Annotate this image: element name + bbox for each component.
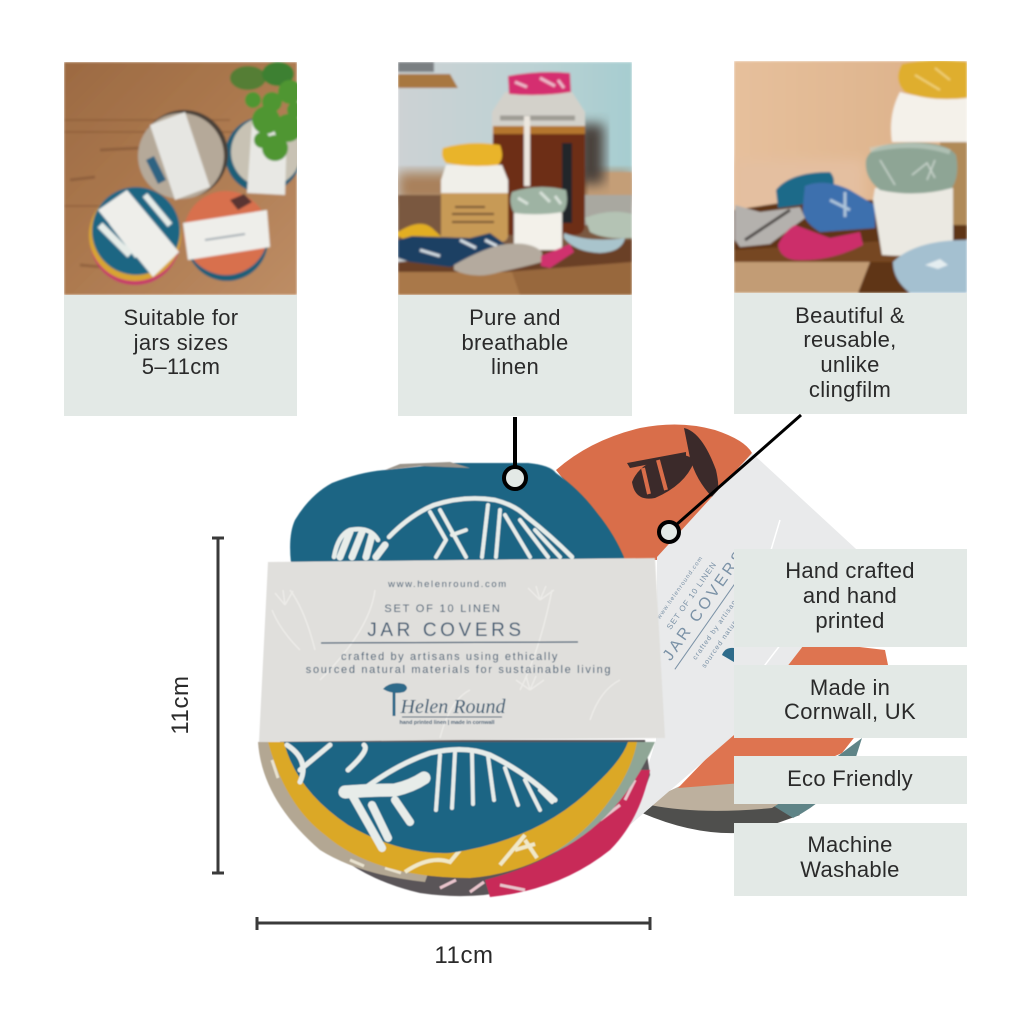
rear band text: www.helenround.com bbox=[656, 555, 705, 621]
panel: machine washable: Washable bbox=[800, 857, 900, 882]
band text bbox=[306, 579, 612, 676]
magenta and grey covers bbox=[280, 740, 650, 896]
table bbox=[398, 240, 632, 274]
panel: pure and breathable linen bbox=[398, 295, 632, 416]
band text: crafted by artisans using ethically bbox=[341, 651, 559, 663]
panel: made in Cornwall: Cornwall, UK bbox=[784, 699, 916, 724]
rear band text: sourced natural materials bbox=[701, 580, 766, 669]
dimension: width 11cm bbox=[257, 917, 650, 969]
band text: SET OF 10 LINEN bbox=[384, 603, 502, 615]
panel: beautiful and reusable: Beautiful & bbox=[795, 303, 905, 328]
photo: jar cover bundles on wooden table bbox=[64, 62, 303, 295]
band text: JAR COVERS bbox=[367, 620, 525, 641]
sage cover bbox=[300, 742, 655, 871]
logo: Helen Round bbox=[383, 683, 506, 726]
big jar bbox=[492, 92, 586, 128]
panel: suitable for jar sizes: jars sizes bbox=[133, 330, 228, 355]
panel: suitable for jar sizes: 5–11cm bbox=[142, 354, 220, 379]
panel: beautiful and reusable bbox=[734, 293, 967, 414]
product: front stack of linen jar covers bbox=[258, 462, 665, 897]
rear band text bbox=[638, 529, 776, 684]
panel: pure and breathable linen: Pure and bbox=[469, 305, 561, 330]
panel: hand crafted bbox=[734, 549, 967, 647]
dimension: width 11cm: 11cm bbox=[434, 942, 494, 969]
panel: suitable for jar sizes bbox=[64, 295, 297, 416]
logo: Helen Round: Helen Round bbox=[400, 696, 506, 718]
panel: hand crafted: printed bbox=[815, 608, 885, 633]
illustration: upper bluebell print bbox=[334, 498, 572, 557]
panel: eco friendly bbox=[734, 756, 967, 804]
rear band text: SET OF 10 LINEN bbox=[665, 560, 718, 631]
small jar bbox=[514, 210, 562, 250]
panel: suitable for jar sizes: Suitable for bbox=[124, 305, 238, 330]
illustration: lower bluebell print bbox=[287, 745, 555, 848]
panel: machine washable bbox=[734, 823, 967, 896]
photo: sage linen covered jar bbox=[734, 60, 967, 293]
miso jar bbox=[439, 162, 510, 195]
panel: hand crafted: and hand bbox=[803, 583, 897, 608]
panel: made in Cornwall bbox=[734, 665, 967, 738]
dimension: height 11cm bbox=[167, 538, 224, 873]
pointer: linen callout bbox=[504, 417, 526, 489]
panel: made in Cornwall: Made in bbox=[810, 675, 890, 700]
panel: beautiful and reusable: reusable, bbox=[803, 327, 897, 352]
rear band text: crafted by artisans using bbox=[692, 575, 755, 661]
pointer: clingfilm callout bbox=[659, 415, 801, 542]
teal lower cover bbox=[284, 742, 628, 853]
band text: sourced natural materials for sustainable living bbox=[306, 664, 612, 676]
panel: pure and breathable linen: breathable bbox=[462, 330, 568, 355]
panel: beautiful and reusable: unlike bbox=[820, 352, 880, 377]
panel: hand crafted: Hand crafted bbox=[785, 558, 915, 583]
panel: beautiful and reusable: clingfilm bbox=[809, 377, 891, 402]
panel: eco friendly: Eco Friendly bbox=[787, 766, 913, 791]
logo: Helen Round: hand printed linen | made in cornwall bbox=[400, 720, 495, 726]
rear band text: JAR COVERS bbox=[660, 546, 750, 664]
linen cover bbox=[258, 742, 430, 882]
product: rear orange jar cover bundle bbox=[556, 424, 888, 833]
band text: www.helenround.com bbox=[387, 579, 508, 590]
icon: bee print bbox=[627, 428, 718, 499]
dimension: height 11cm: 11cm bbox=[167, 675, 194, 735]
paper band bbox=[259, 558, 665, 742]
panel: pure and breathable linen: linen bbox=[491, 354, 539, 379]
photo: jars with linen covers bbox=[398, 62, 632, 295]
panel: machine washable: Machine bbox=[807, 832, 893, 857]
teal upper cover bbox=[290, 463, 625, 563]
fabrics bbox=[398, 222, 442, 240]
yellow cover bbox=[268, 742, 637, 878]
